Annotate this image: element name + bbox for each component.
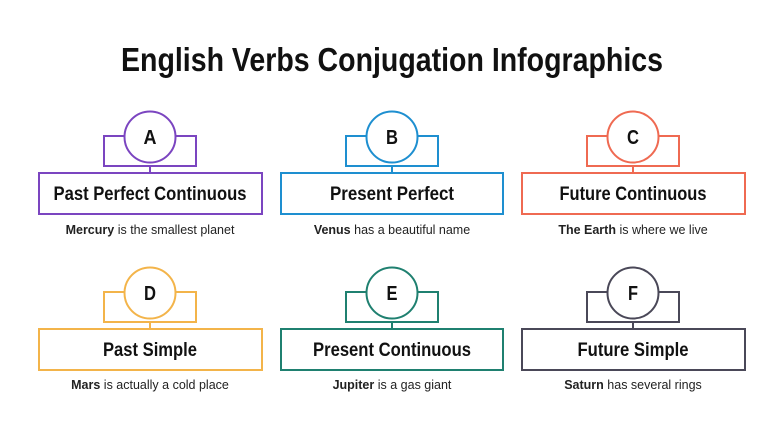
panel: C: C <box>627 127 639 149</box>
panel: F <box>522 268 745 392</box>
panel: C: Future Continuous <box>560 184 706 205</box>
panel: B: Venus has a beautiful name <box>314 223 470 237</box>
panel: C <box>522 112 745 237</box>
panel: F: Future Simple <box>578 340 688 361</box>
panel: A: A <box>144 127 156 149</box>
panel: A: Past Perfect Continuous <box>54 184 246 205</box>
panel: D: D <box>144 283 156 305</box>
panel: C: The Earth is where we live <box>558 223 708 237</box>
title: English Verbs Conjugation Infographics <box>121 41 663 78</box>
panel: F: Saturn has several rings <box>564 378 702 392</box>
panel: E <box>281 268 503 392</box>
panel: B: B <box>386 127 398 149</box>
panel: A: Mercury is the smallest planet <box>66 223 235 237</box>
panel: E: E <box>386 283 398 305</box>
panel: F: F <box>628 283 638 305</box>
panel: D: Mars is actually a cold place <box>71 378 229 392</box>
panel: D <box>39 268 262 392</box>
panel: E: Jupiter is a gas giant <box>333 378 452 392</box>
panel: D: Past Simple <box>103 340 197 361</box>
panel: B <box>281 112 503 237</box>
panel: B: Present Perfect <box>330 184 455 205</box>
panel: E: Present Continuous <box>313 340 471 361</box>
panel: A <box>39 112 262 237</box>
